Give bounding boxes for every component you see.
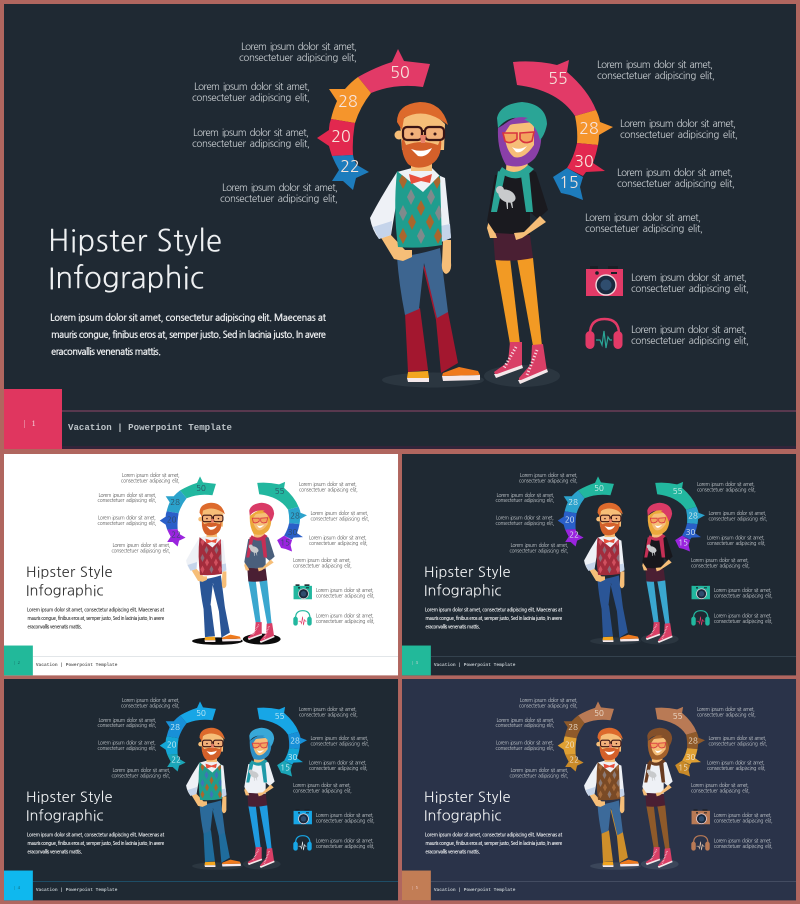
icon: headphones xyxy=(586,319,622,349)
panel: main slide, dark pink theme xyxy=(4,4,796,449)
labels: consectetuer adipiscing elit, xyxy=(496,723,555,728)
label: 15: consectetuer adipiscing elit, xyxy=(585,223,703,234)
labels: consectetuer adipiscing elit, xyxy=(299,487,358,492)
chart: right arc: 28 xyxy=(688,737,698,746)
label: 20 xyxy=(192,127,310,149)
title: Infographic xyxy=(48,264,204,293)
labels: consectetuer adipiscing elit, xyxy=(316,619,375,624)
chart: right arc xyxy=(513,60,613,200)
chart: left arc: 50 xyxy=(196,484,206,493)
illustration: man xyxy=(584,728,641,870)
labels: Lorem ipsum dolor sit amet, xyxy=(293,558,351,563)
labels: Lorem ipsum dolor sit amet, xyxy=(122,698,180,703)
labels: Lorem ipsum dolor sit amet, xyxy=(707,761,765,766)
labels: Lorem ipsum dolor sit amet, xyxy=(316,614,374,619)
label: camera: Lorem ipsum dolor sit amet, xyxy=(631,272,747,283)
labels xyxy=(98,473,375,624)
labels: consectetuer adipiscing elit, xyxy=(707,541,766,546)
icon: headphones xyxy=(691,611,710,626)
panel: dark slide, teal theme xyxy=(402,454,796,675)
chart: right arc xyxy=(655,707,705,777)
labels: Lorem ipsum dolor sit amet, xyxy=(691,783,749,788)
labels: consectetuer adipiscing elit, xyxy=(708,742,768,747)
labels: consectetuer adipiscing elit, xyxy=(697,487,756,492)
footer text: Vacation | Powerpoint Template xyxy=(36,887,118,893)
labels: Lorem ipsum dolor sit amet, xyxy=(293,783,351,788)
body text: eraconvallis venenatis mattis. xyxy=(425,850,481,855)
chart: right arc: 28 xyxy=(688,512,698,521)
illustration: woman xyxy=(641,503,679,645)
page number box xyxy=(4,646,33,675)
labels: Lorem ipsum dolor sit amet, xyxy=(497,718,555,723)
icon: camera xyxy=(294,809,312,824)
chart: left arc: 28 xyxy=(170,723,180,732)
label: right 28: consectetuer adipiscing elit, xyxy=(620,129,738,140)
label: 50 xyxy=(239,41,357,63)
labels: consectetuer adipiscing elit, xyxy=(316,593,375,598)
chart: left arc: 22 xyxy=(569,756,579,765)
chart: left arc: 20 xyxy=(167,516,177,525)
label: headphones: Lorem ipsum dolor sit amet, xyxy=(631,324,747,335)
chart: left arc: 22 xyxy=(569,531,579,540)
label: 22 xyxy=(220,182,338,204)
title: Hipster Style xyxy=(26,790,112,805)
label: 15: Lorem ipsum dolor sit amet, xyxy=(585,212,701,223)
footer line xyxy=(33,655,398,657)
chart: left arc xyxy=(317,49,430,190)
labels: Lorem ipsum dolor sit amet, xyxy=(99,493,157,498)
labels: consectetuer adipiscing elit, xyxy=(707,766,766,771)
labels xyxy=(496,698,773,849)
illustration: woman xyxy=(243,503,281,645)
chart: right arc: 55 xyxy=(673,487,683,496)
chart: right arc: 55 xyxy=(548,71,568,87)
chart: left arc: 50 xyxy=(390,65,410,81)
footer text: Vacation | Powerpoint Template xyxy=(434,662,516,668)
labels: Lorem ipsum dolor sit amet, xyxy=(496,516,554,521)
footer band xyxy=(62,446,796,449)
illustration: man xyxy=(584,503,641,645)
labels: consectetuer adipiscing elit, xyxy=(293,788,352,793)
labels: Lorem ipsum dolor sit amet, xyxy=(299,482,357,487)
labels: consectetuer adipiscing elit, xyxy=(714,593,773,598)
labels: Lorem ipsum dolor sit amet, xyxy=(697,482,755,487)
labels: consectetuer adipiscing elit, xyxy=(509,549,569,554)
icon: headphones xyxy=(293,611,312,626)
page number box xyxy=(402,871,431,900)
labels: consectetuer adipiscing elit, xyxy=(316,818,375,823)
page number box: | 2 xyxy=(14,660,20,665)
labels: consectetuer adipiscing elit, xyxy=(714,844,773,849)
body text: mauris congue, finibus eros at, semper justo. Sed in lacinia justo. In avere xyxy=(425,616,563,621)
labels: Lorem ipsum dolor sit amet, xyxy=(520,698,578,703)
chart: right arc: 28 xyxy=(579,121,599,137)
labels: Lorem ipsum dolor sit amet, xyxy=(707,536,765,541)
labels: Lorem ipsum dolor sit amet, xyxy=(691,558,749,563)
footer line xyxy=(33,880,398,882)
body text: Lorem ipsum dolor sit amet, consectetur adipiscing elit. Maecenas at xyxy=(425,833,562,838)
footer text: Vacation | Powerpoint Template xyxy=(68,422,233,433)
footer line xyxy=(431,655,796,657)
body text: eraconvallis venenatis mattis. xyxy=(27,625,83,630)
labels: Lorem ipsum dolor sit amet, xyxy=(112,543,171,548)
label: 30: consectetuer adipiscing elit, xyxy=(617,178,735,189)
labels: Lorem ipsum dolor sit amet, xyxy=(98,741,156,746)
labels: Lorem ipsum dolor sit amet, xyxy=(708,736,767,741)
body text: Lorem ipsum dolor sit amet, consectetur adipiscing elit. Maecenas at xyxy=(27,608,164,613)
chart: left arc xyxy=(558,701,614,772)
footer text: Vacation | Powerpoint Template xyxy=(36,662,118,668)
label: 22: consectetuer adipiscing elit, xyxy=(220,193,338,204)
chart: right arc: 30 xyxy=(686,753,696,762)
labels: Lorem ipsum dolor sit amet, xyxy=(310,511,369,516)
page number box xyxy=(4,871,33,900)
labels: consectetuer adipiscing elit, xyxy=(111,549,171,554)
labels: consectetuer adipiscing elit, xyxy=(98,746,157,751)
title: Hipster Style xyxy=(26,565,112,580)
body text xyxy=(425,833,563,855)
labels: Lorem ipsum dolor sit amet, xyxy=(112,768,171,773)
labels: consectetuer adipiscing elit, xyxy=(310,517,370,522)
chart: right arc xyxy=(655,482,705,552)
label: camera xyxy=(631,272,749,294)
title: Hipster Style xyxy=(48,227,222,256)
page number box: | 4 xyxy=(14,885,20,890)
label: 20: Lorem ipsum dolor sit amet, xyxy=(193,127,309,138)
labels xyxy=(98,698,375,849)
chart: left arc: 22 xyxy=(171,756,181,765)
label: 22: Lorem ipsum dolor sit amet, xyxy=(222,182,338,193)
illustration: woman xyxy=(243,728,281,870)
labels: consectetuer adipiscing elit, xyxy=(98,498,157,503)
chart: right arc: 15 xyxy=(678,539,688,548)
label: 50: Lorem ipsum dolor sit amet, xyxy=(241,41,357,52)
labels: Lorem ipsum dolor sit amet, xyxy=(520,473,578,478)
label: camera: consectetuer adipiscing elit, xyxy=(631,283,749,294)
label: right 28 xyxy=(620,118,738,140)
chart: left arc: 50 xyxy=(196,709,206,718)
illustration: woman xyxy=(484,102,560,387)
chart: right arc: 28 xyxy=(290,512,300,521)
chart: right arc: 15 xyxy=(559,175,579,191)
chart: left arc xyxy=(160,476,216,547)
labels: Lorem ipsum dolor sit amet, xyxy=(299,707,357,712)
chart: left arc: 22 xyxy=(340,159,360,175)
label: 50: consectetuer adipiscing elit, xyxy=(239,52,357,63)
labels: Lorem ipsum dolor sit amet, xyxy=(99,718,157,723)
chart: right arc: 30 xyxy=(288,528,298,537)
labels: Lorem ipsum dolor sit amet, xyxy=(510,543,569,548)
page number box: | 3 xyxy=(412,660,418,665)
labels: consectetuer adipiscing elit, xyxy=(309,766,368,771)
body text: mauris congue, finibus eros at, semper justo. Sed in lacinia justo. In avere xyxy=(27,616,165,621)
labels: Lorem ipsum dolor sit amet, xyxy=(316,813,374,818)
chart: left arc: 50 xyxy=(594,484,604,493)
label: right 28: Lorem ipsum dolor sit amet, xyxy=(620,118,736,129)
title: Infographic xyxy=(26,808,104,823)
labels: consectetuer adipiscing elit, xyxy=(519,478,578,483)
page number box xyxy=(4,389,62,449)
chart: right arc: 28 xyxy=(290,737,300,746)
labels: Lorem ipsum dolor sit amet, xyxy=(714,614,772,619)
labels: consectetuer adipiscing elit, xyxy=(496,521,555,526)
page number box: | 1 xyxy=(24,419,36,428)
label: 28 xyxy=(192,81,310,103)
labels: Lorem ipsum dolor sit amet, xyxy=(310,736,369,741)
labels: Lorem ipsum dolor sit amet, xyxy=(316,588,374,593)
illustration: man xyxy=(186,503,243,645)
label: 20: consectetuer adipiscing elit, xyxy=(192,138,310,149)
icon: camera xyxy=(692,809,710,824)
label: 55: consectetuer adipiscing elit, xyxy=(597,70,715,81)
labels: consectetuer adipiscing elit, xyxy=(708,517,768,522)
body text: mauris congue, finibus eros at, semper justo. Sed in lacinia justo. In avere xyxy=(27,841,165,846)
labels: Lorem ipsum dolor sit amet, xyxy=(714,839,772,844)
chart: left arc: 28 xyxy=(568,498,578,507)
title: Infographic xyxy=(26,583,104,598)
chart: left arc: 50 xyxy=(594,709,604,718)
chart: right arc: 55 xyxy=(275,712,285,721)
icon: camera xyxy=(692,584,710,599)
labels: Lorem ipsum dolor sit amet, xyxy=(708,511,767,516)
labels: Lorem ipsum dolor sit amet, xyxy=(697,707,755,712)
footer line xyxy=(62,410,796,412)
chart: left arc xyxy=(558,476,614,547)
labels: consectetuer adipiscing elit, xyxy=(299,712,358,717)
labels: consectetuer adipiscing elit, xyxy=(691,788,750,793)
labels: consectetuer adipiscing elit, xyxy=(714,818,773,823)
body text xyxy=(27,833,165,855)
chart: left arc: 28 xyxy=(170,498,180,507)
labels: consectetuer adipiscing elit, xyxy=(121,478,180,483)
labels: consectetuer adipiscing elit, xyxy=(691,563,750,568)
label: 55 xyxy=(597,59,715,81)
labels: consectetuer adipiscing elit, xyxy=(98,723,157,728)
chart: right arc xyxy=(257,707,307,777)
body text: Lorem ipsum dolor sit amet, consectetur adipiscing elit. Maecenas at xyxy=(425,608,562,613)
labels: consectetuer adipiscing elit, xyxy=(293,563,352,568)
labels: Lorem ipsum dolor sit amet, xyxy=(98,516,156,521)
body text: Lorem ipsum dolor sit amet, consectetur adipiscing elit. Maecenas at xyxy=(50,312,327,323)
panel: white slide, teal theme xyxy=(4,454,398,675)
label: 30 xyxy=(617,167,735,189)
labels: consectetuer adipiscing elit, xyxy=(121,703,180,708)
page number box: | 5 xyxy=(412,885,418,890)
chart: left arc: 22 xyxy=(171,531,181,540)
labels: Lorem ipsum dolor sit amet, xyxy=(497,493,555,498)
icon: camera xyxy=(586,266,623,296)
labels: consectetuer adipiscing elit, xyxy=(316,844,375,849)
body text xyxy=(50,312,327,357)
labels: consectetuer adipiscing elit, xyxy=(309,541,368,546)
label: headphones xyxy=(631,324,749,346)
title: Hipster Style xyxy=(424,790,510,805)
chart: right arc: 30 xyxy=(288,753,298,762)
illustration: man xyxy=(370,102,484,388)
chart: left arc: 20 xyxy=(565,516,575,525)
labels: Lorem ipsum dolor sit amet, xyxy=(714,588,772,593)
labels: Lorem ipsum dolor sit amet, xyxy=(714,813,772,818)
panel: dark slide, blue theme xyxy=(4,679,398,900)
labels: Lorem ipsum dolor sit amet, xyxy=(309,536,367,541)
body text xyxy=(425,608,563,630)
labels: consectetuer adipiscing elit, xyxy=(697,712,756,717)
labels: Lorem ipsum dolor sit amet, xyxy=(510,768,569,773)
chart: left arc: 28 xyxy=(568,723,578,732)
labels: Lorem ipsum dolor sit amet, xyxy=(496,741,554,746)
chart: right arc: 15 xyxy=(678,764,688,773)
icon: headphones xyxy=(293,836,312,851)
icon: headphones xyxy=(691,836,710,851)
footer text: Vacation | Powerpoint Template xyxy=(434,887,516,893)
chart: right arc: 55 xyxy=(275,487,285,496)
chart: left arc: 20 xyxy=(331,129,351,145)
chart: right arc xyxy=(257,482,307,552)
labels: Lorem ipsum dolor sit amet, xyxy=(122,473,180,478)
label: 55: Lorem ipsum dolor sit amet, xyxy=(597,59,713,70)
labels: consectetuer adipiscing elit, xyxy=(496,498,555,503)
chart: right arc: 15 xyxy=(280,764,290,773)
labels: consectetuer adipiscing elit, xyxy=(310,742,370,747)
labels: Lorem ipsum dolor sit amet, xyxy=(309,761,367,766)
labels: consectetuer adipiscing elit, xyxy=(496,746,555,751)
panel: slate slide, brown theme xyxy=(402,679,796,900)
body text: Lorem ipsum dolor sit amet, consectetur adipiscing elit. Maecenas at xyxy=(27,833,164,838)
labels: consectetuer adipiscing elit, xyxy=(519,703,578,708)
chart: right arc: 30 xyxy=(574,154,594,170)
icon: camera xyxy=(294,584,312,599)
body text xyxy=(27,608,165,630)
label: 28: Lorem ipsum dolor sit amet, xyxy=(194,81,310,92)
body text: eraconvallis venenatis mattis. xyxy=(51,346,161,357)
body text: mauris congue, finibus eros at, semper justo. Sed in lacinia justo. In avere xyxy=(51,329,326,340)
label: 15 xyxy=(585,212,703,234)
label: 30: Lorem ipsum dolor sit amet, xyxy=(617,167,733,178)
labels: Lorem ipsum dolor sit amet, xyxy=(316,839,374,844)
body text: eraconvallis venenatis mattis. xyxy=(27,850,83,855)
title: Hipster Style xyxy=(424,565,510,580)
footer line xyxy=(431,880,796,882)
labels: consectetuer adipiscing elit, xyxy=(111,774,171,779)
body text: mauris congue, finibus eros at, semper justo. Sed in lacinia justo. In avere xyxy=(425,841,563,846)
chart: right arc: 15 xyxy=(280,539,290,548)
chart: left arc: 28 xyxy=(338,94,358,110)
labels: consectetuer adipiscing elit, xyxy=(509,774,569,779)
label: 28: consectetuer adipiscing elit, xyxy=(192,92,310,103)
page number box xyxy=(402,646,431,675)
labels xyxy=(496,473,773,624)
title: Infographic xyxy=(424,583,502,598)
chart: left arc: 20 xyxy=(565,741,575,750)
title: Infographic xyxy=(424,808,502,823)
illustration: man xyxy=(186,728,243,870)
chart: right arc: 30 xyxy=(686,528,696,537)
labels: consectetuer adipiscing elit, xyxy=(714,619,773,624)
body text: eraconvallis venenatis mattis. xyxy=(425,625,481,630)
chart: left arc: 20 xyxy=(167,741,177,750)
chart: left arc xyxy=(160,701,216,772)
labels: consectetuer adipiscing elit, xyxy=(98,521,157,526)
illustration: woman xyxy=(641,728,679,870)
chart: right arc: 55 xyxy=(673,712,683,721)
label: headphones: consectetuer adipiscing elit, xyxy=(631,335,749,346)
